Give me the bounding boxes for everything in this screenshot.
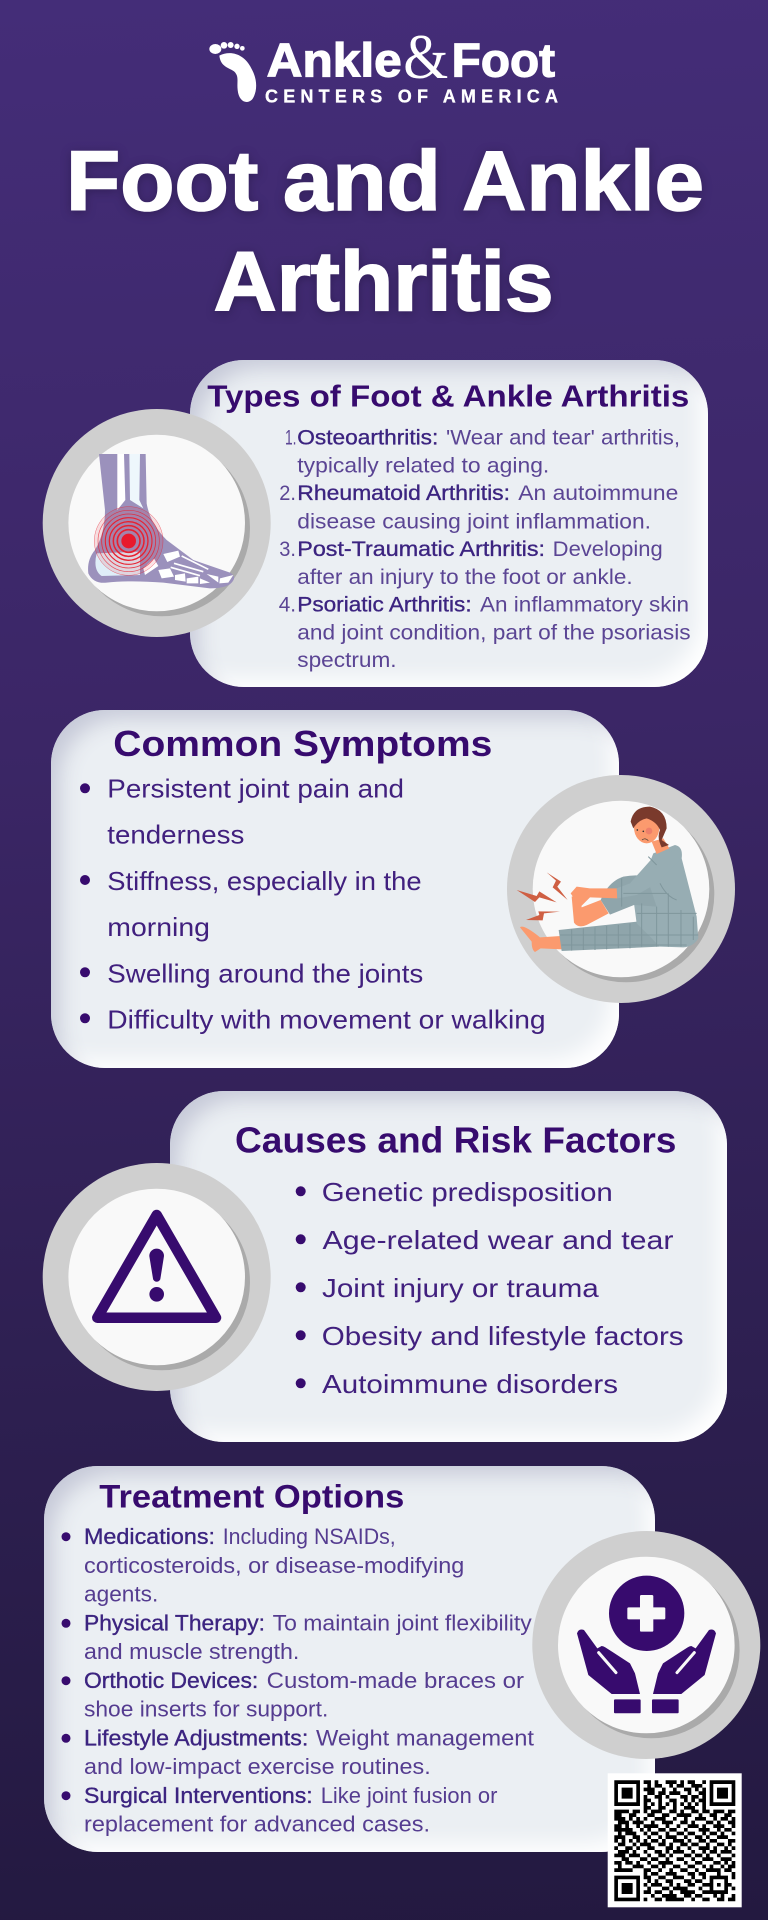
logo wordmark: Ankle: [267, 34, 402, 87]
list: treatments: Orthotic Devices:: [84, 1668, 258, 1693]
list: treatments: Custom-made braces or: [267, 1668, 524, 1693]
list: treatments: To maintain joint flexibility: [273, 1610, 532, 1635]
qr code: [608, 1773, 742, 1908]
list: causes: Genetic predisposition: [322, 1177, 613, 1207]
list: treatments: Like joint fusion or: [321, 1783, 497, 1808]
icon: warning triangle: [42, 1163, 271, 1391]
logo wordmark: [265, 21, 558, 106]
list: causes: Autoimmune disorders: [322, 1369, 618, 1399]
heading: causes: Causes and Risk Factors: [235, 1119, 676, 1160]
heading: common symptoms: Common Symptoms: [113, 723, 492, 764]
list: symptoms: Stiffness, especially in the: [107, 866, 422, 896]
list: treatments: Medications:: [84, 1524, 215, 1549]
list: treatments: corticosteroids, or disease-modifying: [84, 1553, 464, 1578]
logo: [209, 21, 558, 106]
list: treatments: Weight management: [316, 1725, 534, 1750]
panel: causes and risk factors: [170, 1091, 727, 1442]
list: arthritis types: Rheumatoid Arthritis:: [297, 482, 510, 505]
list: symptoms: Swelling around the joints: [107, 958, 423, 988]
list: arthritis types: An autoimmune: [518, 482, 678, 505]
list: arthritis types: Osteoarthritis:: [297, 426, 438, 449]
title: Arthritis: [214, 234, 554, 328]
icon: hands holding medical cross: [532, 1531, 760, 1759]
panel: common symptoms: [51, 710, 619, 1068]
list: symptoms: tenderness: [107, 820, 244, 850]
list: treatments: [62, 1524, 534, 1837]
icon: footprint: [209, 42, 256, 102]
logo wordmark: Foot: [452, 34, 555, 87]
list: treatments: and low-impact exercise routines.: [84, 1754, 431, 1779]
list: arthritis types: Post-Traumatic Arthritis:: [297, 538, 545, 561]
list: arthritis types: spectrum.: [297, 649, 397, 672]
list: causes: Joint injury or trauma: [322, 1273, 599, 1303]
icon: ankle skeleton with pain rings: [42, 409, 271, 637]
list: treatments: Lifestyle Adjustments:: [84, 1725, 308, 1750]
list: symptoms: morning: [107, 912, 210, 942]
list: arthritis types: An inflammatory skin: [480, 594, 689, 617]
list: arthritis types: after an injury to the foot or ankle.: [297, 566, 633, 589]
list: arthritis types: 2.: [279, 482, 296, 505]
list: causes: [296, 1177, 684, 1399]
panel: types of foot and ankle arthritis: [190, 360, 708, 687]
list: symptoms: Difficulty with movement or walking: [107, 1004, 546, 1034]
list: arthritis types: 1.: [285, 426, 296, 449]
list: symptoms: [80, 774, 546, 1034]
list: arthritis types: Psoriatic Arthritis:: [297, 594, 472, 617]
list: treatments: agents.: [84, 1582, 158, 1606]
list: arthritis types: 'Wear and tear' arthritis,: [446, 426, 680, 449]
list: arthritis types: disease causing joint inflammation.: [297, 510, 651, 533]
panel: treatment options: [44, 1466, 655, 1852]
title: [66, 134, 704, 328]
list: arthritis types: typically related to aging.: [297, 454, 549, 477]
icon: person holding painful foot: [507, 775, 735, 1003]
list: arthritis types: and joint condition, part of the psoriasis: [297, 621, 691, 644]
list: treatments: Surgical Interventions:: [84, 1783, 313, 1808]
list: treatments: shoe inserts for support.: [84, 1697, 328, 1722]
list: treatments: Physical Therapy:: [84, 1610, 265, 1635]
list: causes: Age-related wear and tear: [322, 1225, 674, 1255]
heading: treatment options: Treatment Options: [99, 1479, 404, 1515]
list: arthritis types: 4.: [279, 594, 296, 617]
list: arthritis types: [279, 426, 691, 672]
title: Foot and Ankle: [66, 134, 704, 228]
list: arthritis types: Developing: [553, 538, 663, 561]
list: causes: Obesity and lifestyle factors: [322, 1321, 684, 1351]
logo wordmark: &: [403, 21, 448, 92]
list: treatments: Including NSAIDs,: [223, 1524, 396, 1549]
list: arthritis types: 3.: [279, 538, 296, 561]
list: treatments: replacement for advanced cases.: [84, 1812, 430, 1837]
list: treatments: and muscle strength.: [84, 1639, 299, 1664]
list: symptoms: Persistent joint pain and: [107, 774, 404, 804]
heading: types: Types of Foot & Ankle Arthritis: [207, 379, 689, 414]
logo wordmark: CENTERS OF AMERICA: [265, 86, 558, 106]
